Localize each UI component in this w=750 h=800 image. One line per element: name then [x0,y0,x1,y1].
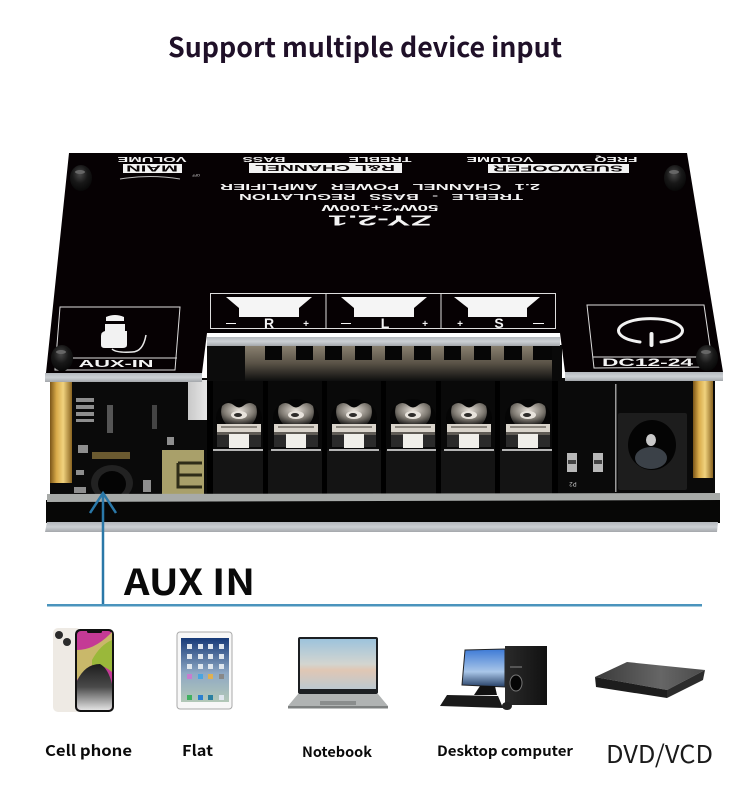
label box: SUBWOOFER: SUBWOOFER [493,164,623,174]
board printed labels: BASS [242,155,286,162]
capacitor [188,380,234,420]
label: notebook: Notebook [302,742,373,762]
label: flat: Flat [182,740,214,761]
brass post left [50,380,72,483]
speaker icon L: + [422,319,428,330]
icon: desktop computer [440,646,547,710]
plate silver edge right [565,372,723,381]
plug icon [101,315,146,352]
label box: MAIN: MAIN [126,164,178,174]
plate screws [51,165,718,371]
speaker icon S: S [494,315,504,331]
board printed text: regulation: TREBLE - BASS REGULATION [239,192,523,202]
lower board: silver front edge [47,493,720,502]
speaker icon L [341,297,428,331]
OFF dial mark: OFF [191,173,200,178]
terminal block base [207,380,558,495]
plate silver edge center [207,337,560,346]
divider line [47,604,702,606]
terminal rib slots [265,345,552,360]
board printed text: ZY-2.1: ZY-2.1 [328,212,432,228]
brass post right [693,378,713,478]
AUX-IN label [55,307,180,370]
amplifier board photo [45,153,723,532]
icon: cell phone [53,628,114,712]
label box: MAIN [123,164,182,174]
label: desktop computer: Desktop computer [437,741,574,761]
icon: DVD player [595,662,705,698]
board printed text: amplifier: 2.1 CHANNEL POWER AMPLIFIER [220,182,540,192]
SMD components [74,398,174,493]
terminal block lower face [207,450,558,494]
lower board: silver bottom edge [45,522,718,532]
plate silver edge left [45,373,202,382]
board printed labels: TREBLE [348,155,412,162]
speaker terminals label [210,293,556,331]
top plate [46,153,723,373]
terminal screws [216,399,551,448]
label box: SUBWOOFER [488,164,629,174]
AUX IN heading: AUX IN [123,554,255,606]
terminal ribs [207,345,552,381]
AUX jack [91,465,133,501]
P2 SMD parts: P2 [569,480,577,486]
title: Support multiple device input [168,26,562,65]
label: DVD/VCD: DVD/VCD [606,736,713,771]
speaker icon L: L [381,315,390,331]
board printed labels: FREQ [593,155,638,162]
arrow to AUX jack [90,493,116,605]
icon: tablet [177,632,232,709]
board printed labels [117,155,638,162]
DC jack [615,384,687,492]
speaker icon S: + [457,319,463,330]
lower board: black gap [46,500,720,523]
speaker icon R: R [264,315,274,331]
label: cell phone: Cell phone [45,740,132,761]
PCB antenna [162,450,204,494]
OFF dial mark [120,173,200,179]
DC power label: DC12-24 [602,357,695,369]
PCB electronics area [50,378,715,496]
P2 SMD parts [567,453,603,486]
board printed labels: VOLUME [466,155,534,162]
board printed text: power: 50W*2+100W [320,203,438,212]
board printed labels: VOLUME [117,155,186,162]
label box: R&L CHANNEL [249,163,402,173]
speaker icon R: + [303,319,309,330]
icon: laptop [288,637,388,708]
speaker icon S [454,297,544,331]
power icon [618,319,682,345]
DC power label [587,305,713,369]
speaker icon R [226,297,312,331]
AUX-IN label: AUX-IN [78,359,154,370]
label box: R&L CHANNEL: R&L CHANNEL [255,163,395,173]
